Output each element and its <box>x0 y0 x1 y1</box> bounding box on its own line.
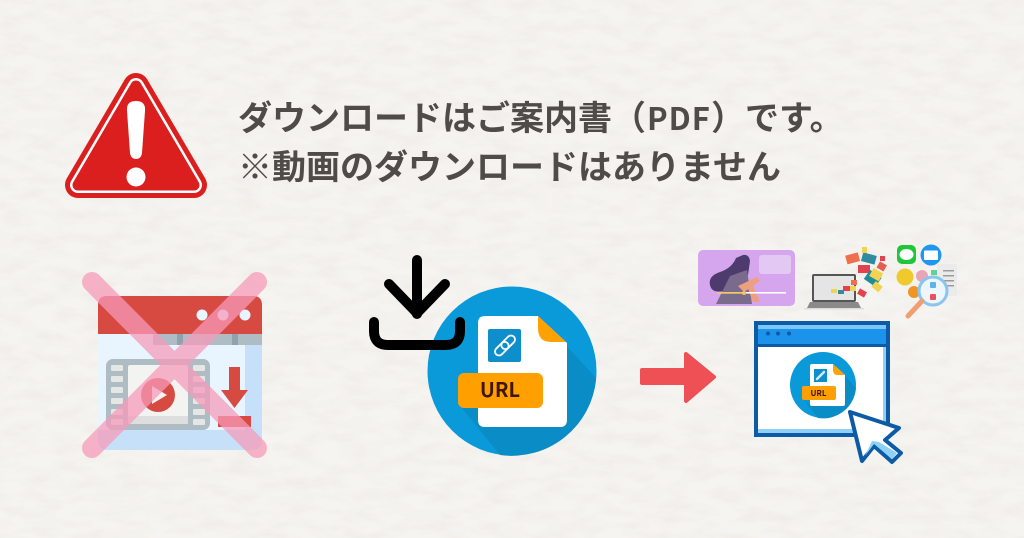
icon: download arrow and tray <box>374 260 460 345</box>
icon: warning triangle <box>78 86 194 186</box>
thumbnail: laptop with mail icons <box>804 247 887 310</box>
thumbnail: purple video card <box>698 250 795 306</box>
thumbnail: LINE, mail and search icons <box>896 244 957 316</box>
icon: browser window with URL badge and cursor <box>756 323 901 462</box>
icon: URL document in blue circle <box>428 286 596 456</box>
heading line 2: ※動画のダウンロードはありません <box>238 140 781 189</box>
mini URL badge <box>790 352 856 418</box>
mini URL badge: URL <box>810 388 827 399</box>
heading line 1: PDF <box>647 94 711 139</box>
heading line 1: ダウンロードはご案内書（ ）です。 <box>238 91 844 140</box>
arrow <box>642 354 714 401</box>
icon: crossed-out video download window <box>92 282 262 450</box>
icon: URL document in blue circle: URL <box>480 374 520 403</box>
